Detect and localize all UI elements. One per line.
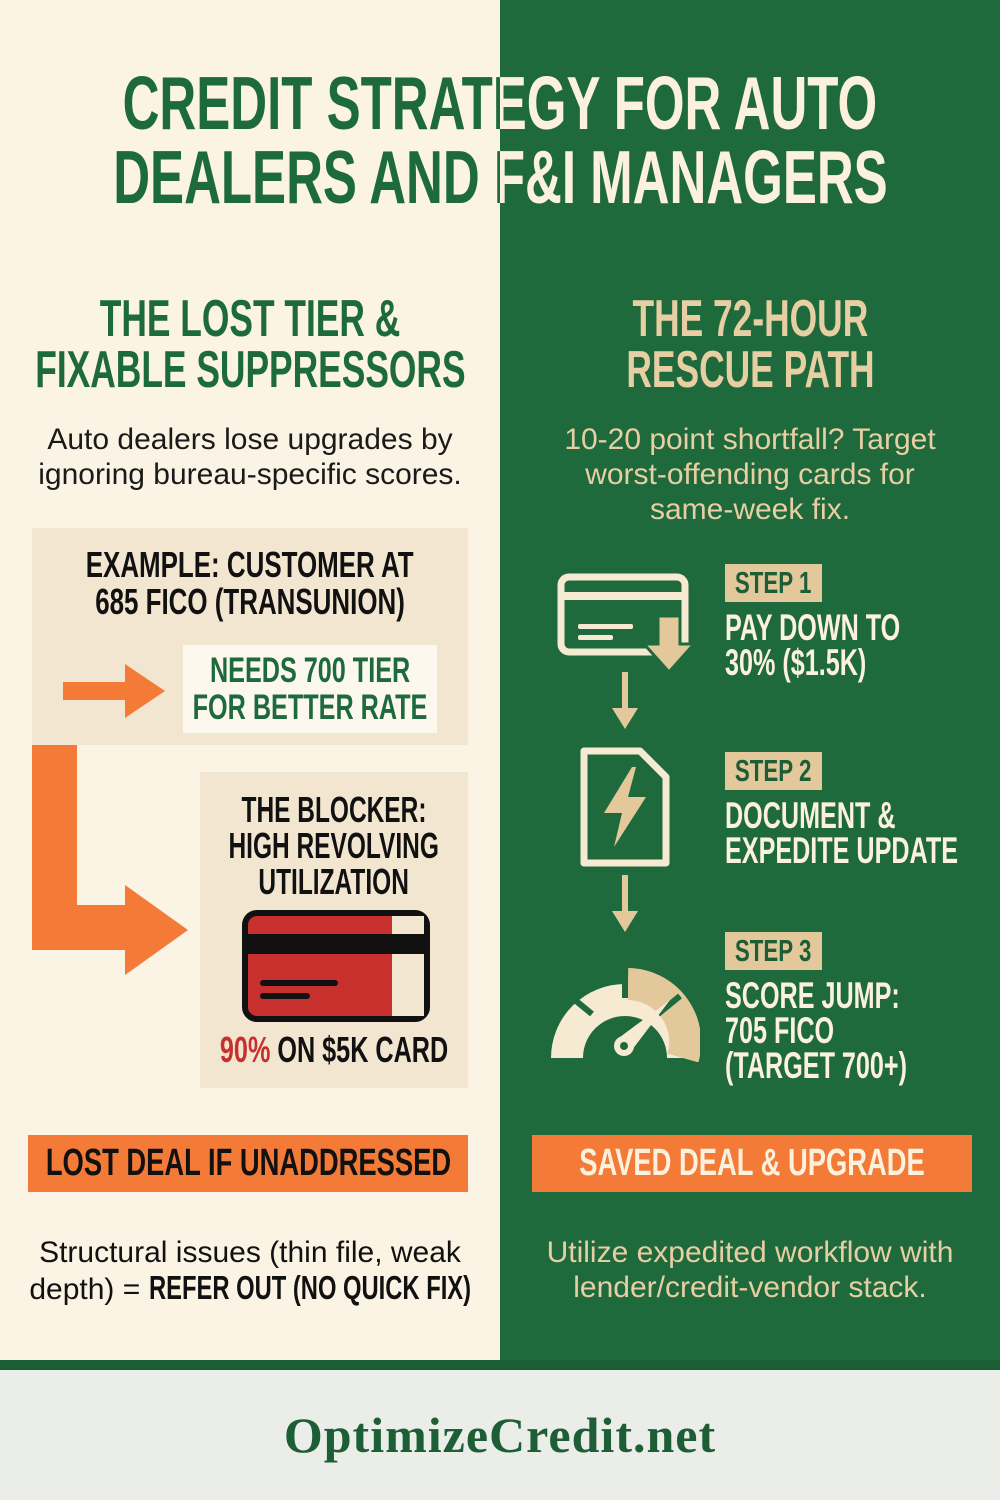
step 3: SCORE JUMP: xyxy=(725,975,900,1016)
step 3 xyxy=(725,932,907,1086)
right intro text xyxy=(564,423,936,526)
right bottom text: lender/credit-vendor stack. xyxy=(573,1271,927,1304)
blocker text xyxy=(229,789,439,902)
step 2: EXPEDITE UPDATE xyxy=(725,830,958,871)
icon: red credit card xyxy=(242,910,430,1022)
step 1 xyxy=(725,564,900,683)
L arrow xyxy=(32,745,188,975)
arrow down 1 xyxy=(612,672,638,729)
icon: gauge xyxy=(551,968,700,1062)
background right xyxy=(500,0,1000,1360)
right intro text: same-week fix. xyxy=(650,493,850,526)
utilization stat: 90% ON $5K CARD xyxy=(220,1029,448,1070)
example box xyxy=(32,528,468,745)
left heading: THE LOST TIER & xyxy=(100,290,400,348)
saved deal banner xyxy=(532,1135,972,1192)
left bottom text: REFER OUT (NO QUICK FIX) xyxy=(149,1269,471,1306)
lost deal banner: LOST DEAL IF UNADDRESSED xyxy=(45,1142,451,1184)
right heading: RESCUE PATH xyxy=(626,341,874,399)
left bottom text xyxy=(29,1236,471,1306)
arrow down 2 xyxy=(612,875,638,932)
small arrow xyxy=(63,664,165,718)
right bottom text xyxy=(547,1236,953,1304)
saved deal banner: SAVED DEAL & UPGRADE xyxy=(579,1142,925,1184)
example text: 685 FICO (TRANSUNION) xyxy=(95,581,405,622)
step 2: STEP 2 xyxy=(735,753,812,788)
title: DEALERS AND F&I MANAGERS xyxy=(113,135,887,219)
right heading: THE 72-HOUR xyxy=(632,290,868,348)
lost deal banner xyxy=(28,1135,468,1192)
example text xyxy=(86,544,414,622)
left heading xyxy=(35,290,465,399)
right bottom text: Utilize expedited workflow with xyxy=(547,1236,953,1269)
blocker text: UTILIZATION xyxy=(259,861,409,902)
title: CREDIT STRATEGY FOR AUTO xyxy=(123,61,877,145)
footer xyxy=(0,1370,1000,1500)
blocker box xyxy=(200,772,468,1088)
left bottom text: Structural issues (thin file, weak xyxy=(39,1236,461,1269)
blocker text: HIGH REVOLVING xyxy=(229,825,439,866)
right intro text: 10-20 point shortfall? Target xyxy=(564,423,936,456)
right intro text: worst-offending cards for xyxy=(585,458,915,491)
background left xyxy=(0,0,500,1360)
needs 700 tier box xyxy=(183,645,437,733)
left intro text: Auto dealers lose upgrades by xyxy=(47,423,453,456)
title xyxy=(116,76,886,204)
needs 700 tier box: FOR BETTER RATE xyxy=(193,688,427,727)
step 2 xyxy=(725,752,958,871)
needs 700 tier box: NEEDS 700 TIER xyxy=(210,651,410,690)
left intro text: ignoring bureau-specific scores. xyxy=(38,458,462,491)
icon: card pay down xyxy=(558,574,690,670)
step 3: STEP 3 xyxy=(735,933,812,968)
left intro text xyxy=(38,423,462,491)
icon: document lightning xyxy=(580,748,670,866)
step 2: DOCUMENT & xyxy=(725,795,896,836)
step 1: 30% ($1.5K) xyxy=(725,642,866,683)
title: DEALERS AND F&I MANAGERS xyxy=(113,135,887,219)
step 1: STEP 1 xyxy=(735,565,812,600)
blocker text: THE BLOCKER: xyxy=(242,789,426,830)
step 1: PAY DOWN TO xyxy=(725,607,900,648)
title: CREDIT STRATEGY FOR AUTO xyxy=(123,61,877,145)
example text: EXAMPLE: CUSTOMER AT xyxy=(86,544,414,585)
left heading: FIXABLE SUPPRESSORS xyxy=(35,341,465,399)
step 3: (TARGET 700+) xyxy=(725,1045,907,1086)
right heading xyxy=(626,290,874,399)
left bottom text: depth) = xyxy=(29,1273,140,1306)
footer: OptimizeCredit.net xyxy=(284,1407,716,1463)
step 3: 705 FICO xyxy=(725,1010,834,1051)
